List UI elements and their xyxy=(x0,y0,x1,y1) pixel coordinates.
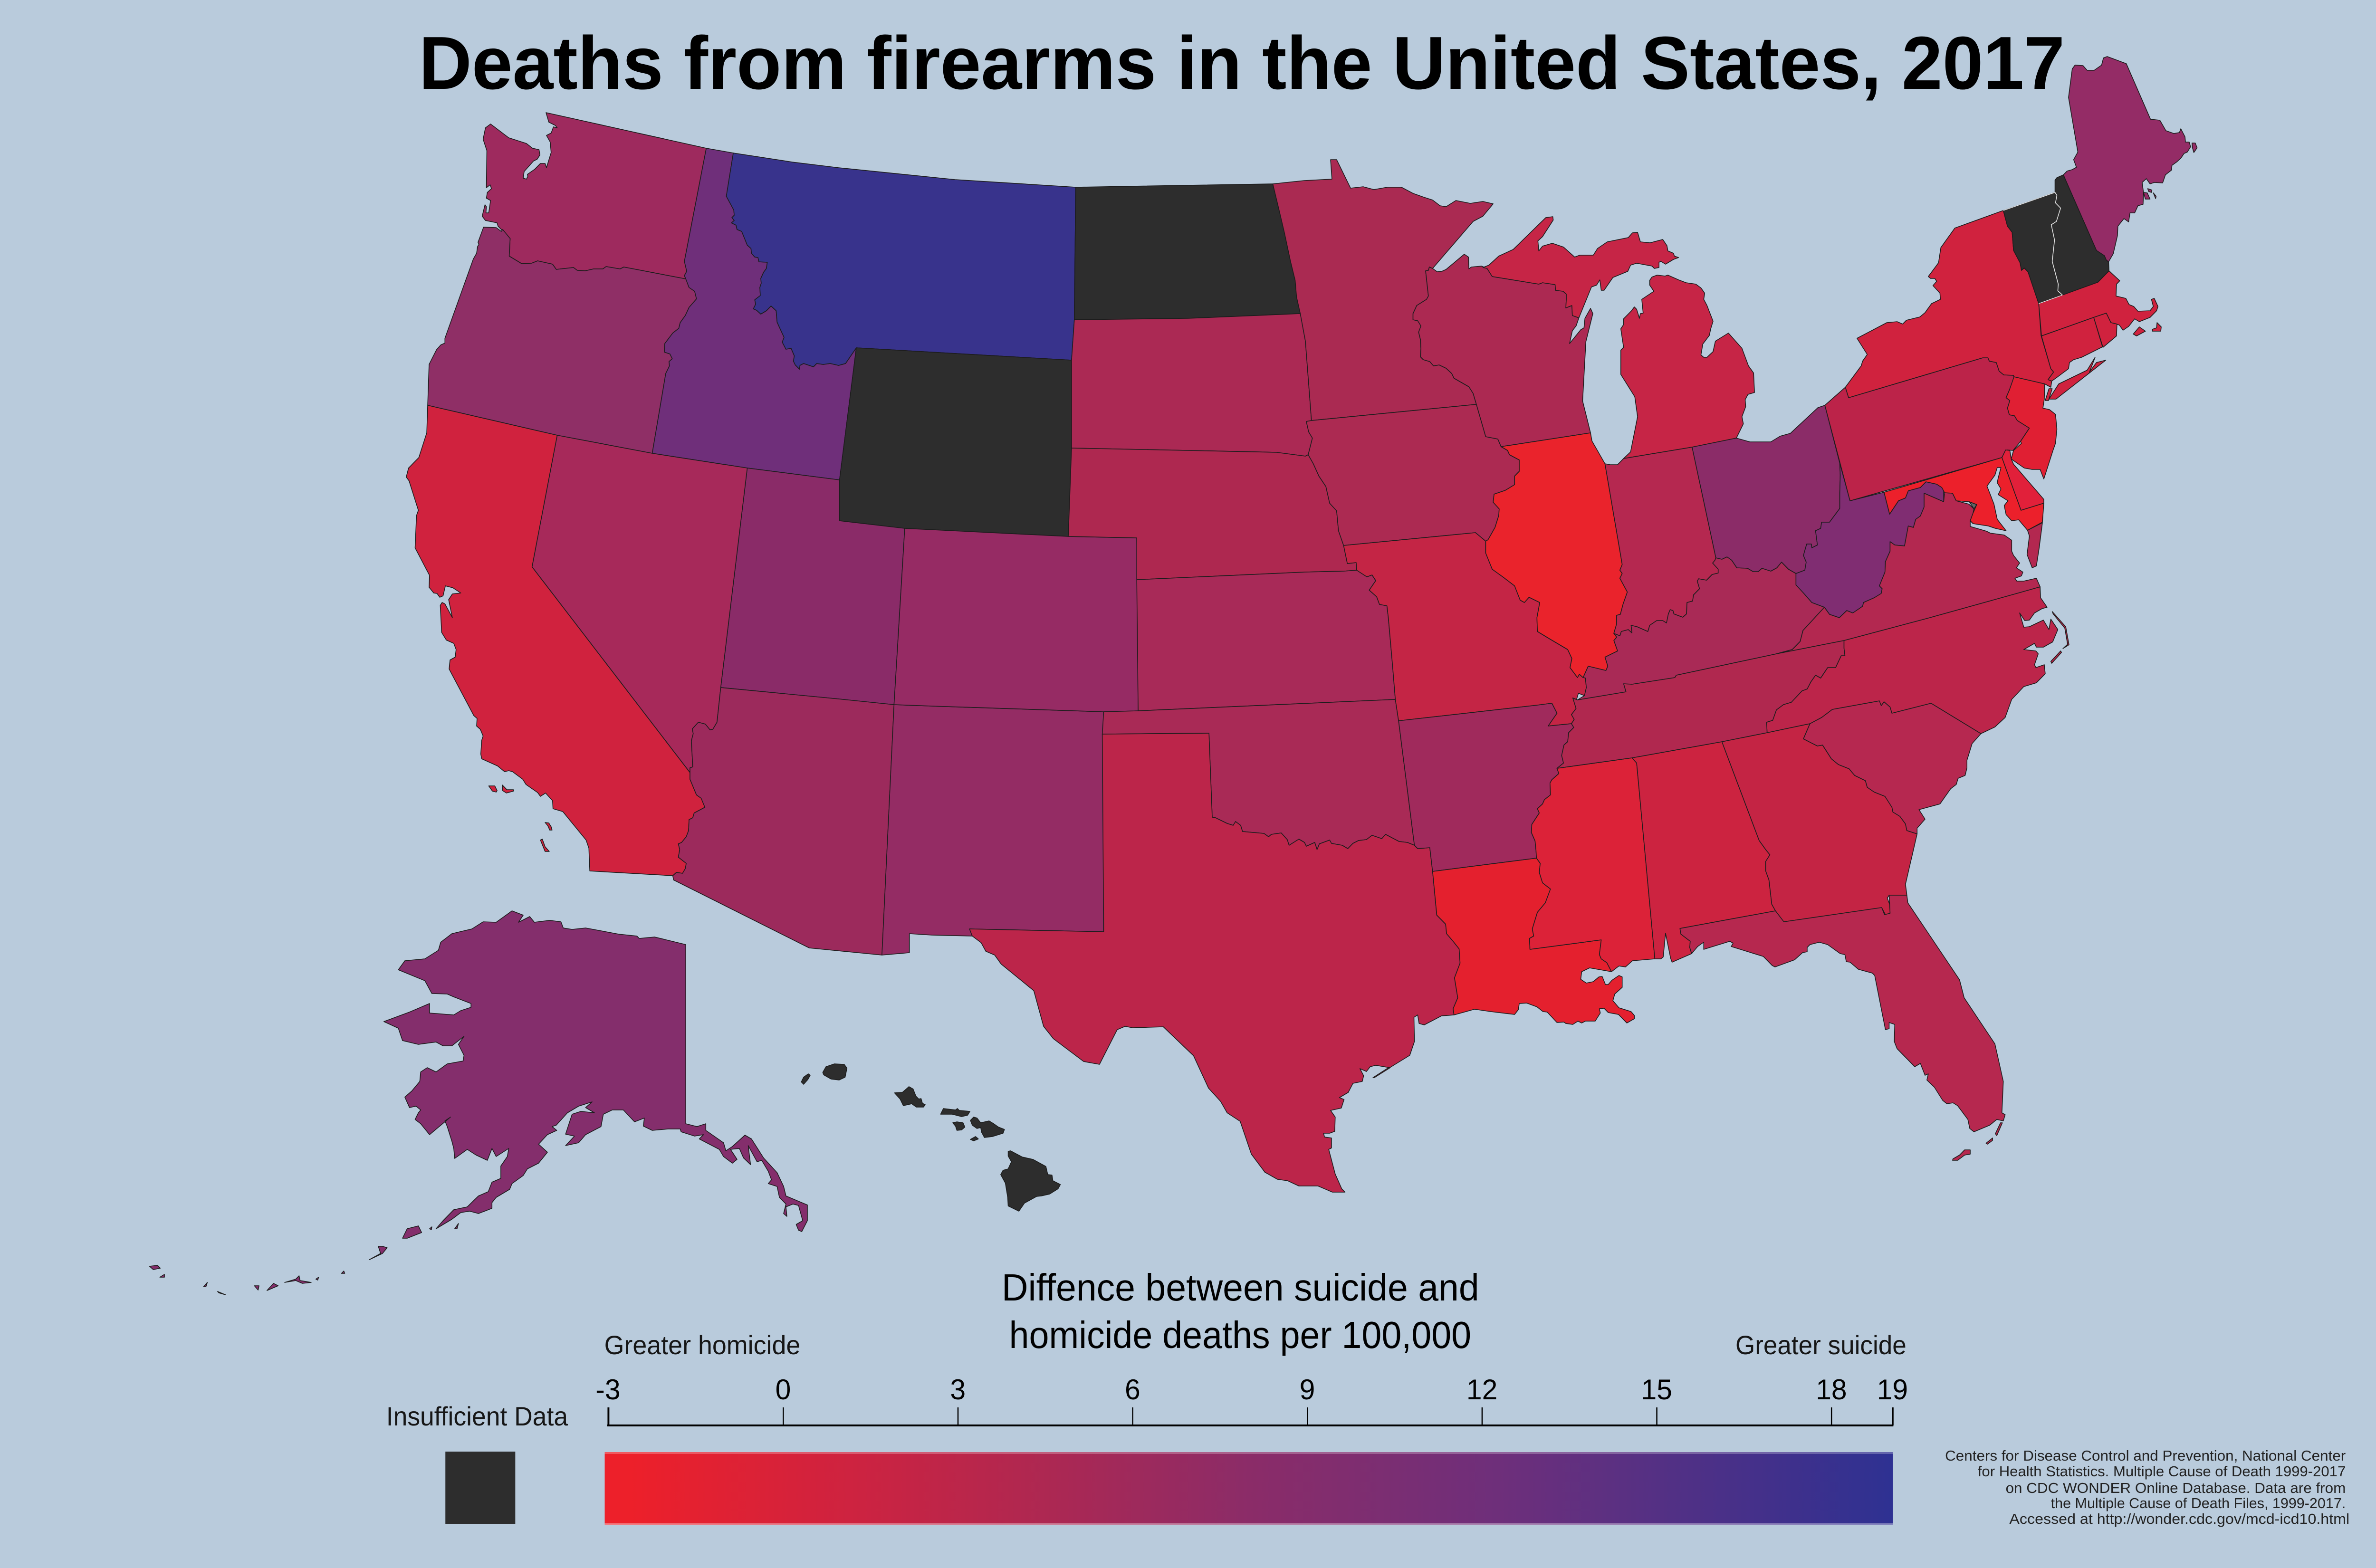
state: Oregon xyxy=(428,227,697,453)
source note xyxy=(1945,1447,2349,1527)
state: Massachusetts xyxy=(2039,271,2161,336)
scale tick labels: 15 xyxy=(1641,1373,1672,1405)
label: greater homicide: Greater homicide xyxy=(604,1330,800,1360)
state: South Carolina xyxy=(1803,701,1981,834)
map: United States xyxy=(150,57,2197,1295)
scale axis with ticks xyxy=(607,1407,1894,1426)
state: Mississippi xyxy=(1530,758,1655,972)
state: Alaska xyxy=(150,911,807,1295)
source note: on CDC WONDER Online Database. Data are from xyxy=(2006,1480,2346,1496)
state: Iowa xyxy=(1306,404,1519,545)
legend heading: Diffence between suicide and xyxy=(1002,1266,1479,1309)
state: Nevada xyxy=(532,435,747,773)
state: Rhode Island xyxy=(2094,313,2117,347)
state: New Mexico xyxy=(882,705,1104,955)
state: Wisconsin xyxy=(1413,254,1593,447)
legend heading: homicide deaths per 100,000 xyxy=(1009,1313,1471,1356)
state: Oklahoma xyxy=(1102,699,1414,850)
state: Montana xyxy=(726,153,1076,369)
source note: Accessed at http://wonder.cdc.gov/mcd-icd10.html xyxy=(2009,1511,2349,1527)
state: New Jersey xyxy=(2006,377,2057,479)
state: Arkansas xyxy=(1399,703,1574,871)
source note: for Health Statistics. Multiple Cause of Death 1999-2017 xyxy=(1978,1463,2346,1480)
state: Tennessee xyxy=(1557,641,1845,768)
state: Illinois xyxy=(1485,433,1628,678)
scale tick labels xyxy=(595,1373,1908,1405)
state: Kansas xyxy=(1137,570,1395,711)
scale tick labels: 18 xyxy=(1816,1373,1847,1405)
state: Maryland xyxy=(1884,458,2044,531)
label: insufficient data: Insufficient Data xyxy=(386,1402,568,1431)
legend heading xyxy=(1002,1266,1479,1356)
state: Missouri xyxy=(1343,533,1586,726)
label: greater suicide: Greater suicide xyxy=(1735,1330,1907,1360)
scale tick labels: 0 xyxy=(776,1373,791,1405)
state: Virginia xyxy=(1776,493,2042,654)
state: Washington xyxy=(482,113,706,279)
source note: Centers for Disease Control and Prevention, National Center xyxy=(1945,1447,2346,1464)
state: Maine xyxy=(2063,57,2197,262)
state: Wyoming xyxy=(840,348,1072,536)
state: Idaho xyxy=(652,148,856,480)
scale tick labels: 19 xyxy=(1877,1373,1908,1405)
state: North Carolina xyxy=(1767,587,2069,734)
district: Washington DC xyxy=(1969,502,1977,509)
state: Arizona xyxy=(673,688,894,955)
state: Minnesota xyxy=(1273,160,1493,421)
state: New Hampshire xyxy=(2051,175,2109,295)
state: Delaware xyxy=(2002,450,2044,510)
state: California xyxy=(406,405,705,876)
scale tick labels: 6 xyxy=(1125,1373,1140,1405)
state: Ohio xyxy=(1692,405,1840,574)
state: Nebraska xyxy=(1068,448,1357,580)
scale tick labels: 9 xyxy=(1300,1373,1315,1405)
state: Indiana xyxy=(1605,447,1718,636)
state: Utah xyxy=(721,468,905,705)
state: Georgia xyxy=(1722,724,1917,922)
state: Louisiana xyxy=(1433,858,1634,1024)
scale tick labels: -3 xyxy=(595,1373,621,1405)
state: Vermont xyxy=(2003,192,2062,304)
swatch: insufficient data xyxy=(445,1452,515,1524)
state: Alabama xyxy=(1632,742,1775,962)
state: Michigan xyxy=(1483,217,1754,459)
state: Colorado xyxy=(894,528,1138,712)
scale tick labels: 12 xyxy=(1466,1373,1497,1405)
source note: the Multiple Cause of Death Files, 1999-2017. xyxy=(2051,1495,2346,1511)
state: New York xyxy=(1845,210,2106,401)
state: Hawaii xyxy=(801,1064,1060,1211)
state: South Dakota xyxy=(1072,314,1313,456)
title: Deaths from firearms in the United States, 2017 xyxy=(419,21,2065,105)
colour scale bar xyxy=(605,1452,1893,1525)
state: Connecticut xyxy=(2041,317,2103,381)
state: West Virginia xyxy=(1796,463,1944,618)
state: Texas xyxy=(969,733,1460,1192)
state: North Dakota xyxy=(1074,184,1300,320)
state: Pennsylvania xyxy=(1825,358,2030,501)
scale tick labels: 3 xyxy=(950,1373,966,1405)
state: Florida xyxy=(1680,895,2005,1160)
state: Kentucky xyxy=(1578,557,1824,700)
